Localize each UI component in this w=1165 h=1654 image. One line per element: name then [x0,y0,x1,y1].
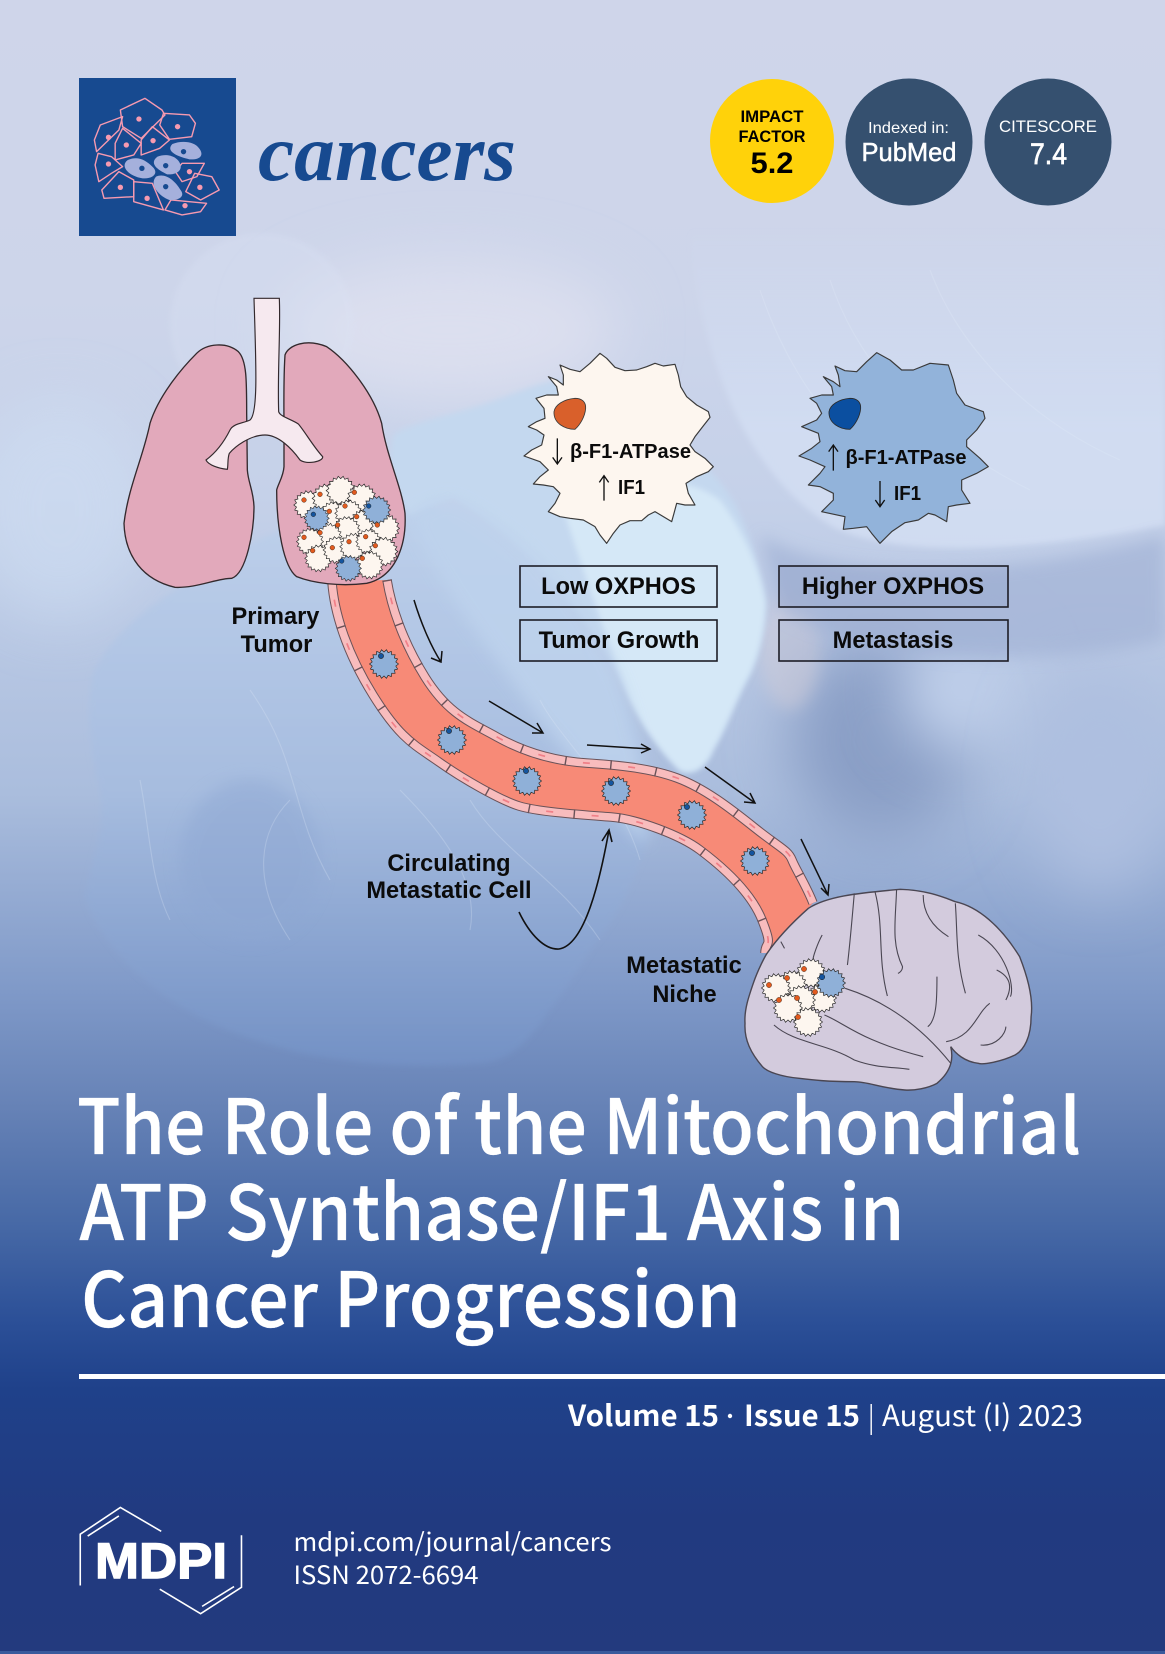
right lung [277,343,405,585]
label: metastatic niche: Niche [652,982,717,1008]
left lung [124,345,254,587]
box: metastasis [779,620,1008,661]
trachea and bronchi [206,298,323,469]
journal URL and ISSN [294,1523,612,1592]
text: low OXPHOS cell markers: β-F1-ATPase [570,441,691,463]
journal logo: blue square with cells [79,78,236,236]
box: tumor growth [520,620,717,661]
MDPI logo: MDPI [95,1533,227,1589]
cell: higher OXPHOS metastatic cell [799,353,988,543]
box: tumor growth: Tumor Growth [539,628,699,654]
near lobe [409,499,647,846]
badge: impact factor: 5.2 [750,147,794,180]
text: low OXPHOS cell markers [570,441,691,499]
text: higher OXPHOS cell markers: IF1 [894,483,921,505]
box: higher OXPHOS [779,566,1008,607]
badge: citescore [984,78,1112,206]
label: circulating metastatic cell with pointer arrow [366,830,612,949]
divider rule [79,1374,1165,1379]
cell: low OXPHOS tumor cell [524,353,713,543]
badge: impact factor [710,79,834,203]
badge: indexed in PubMed: Indexed in: [868,120,949,137]
badge: indexed in PubMed: PubMed [862,137,956,167]
brain with metastatic niche [745,889,1032,1090]
text: higher OXPHOS cell markers [846,447,966,505]
box: low OXPHOS [520,566,717,607]
blood vessel with circulating metastatic cells [332,580,813,953]
flow arrows along the vessel [414,600,829,895]
label: primary tumor: Tumor [241,632,312,658]
label: primary tumor [232,604,319,658]
box: low OXPHOS: Low OXPHOS [541,574,696,600]
title: ATP Synthase/IF1 Axis in [80,1152,904,1262]
journal URL and ISSN: mdpi.com/journal/cancers [294,1523,612,1559]
title: Cancer Progression [81,1239,741,1349]
MDPI logo [80,1507,241,1614]
badge: impact factor: FACTOR [738,128,806,146]
badge: indexed in PubMed [846,78,972,206]
volume and issue line: August (I) 2023 [882,1393,1083,1435]
badge: citescore: CITESCORE [999,117,1097,136]
far lobe [391,380,765,772]
title: The Role of the Mitochondrial [77,1066,1081,1176]
volume and issue line [567,1393,1083,1435]
journal name: cancers [258,110,516,198]
text: low OXPHOS cell markers: IF1 [618,477,645,499]
label: metastatic niche [626,953,742,1008]
upper right bowl [690,230,1165,548]
badge: citescore: 7.4 [1030,138,1067,171]
label: metastatic niche: Metastatic [626,953,742,979]
cell body [85,492,649,1065]
title [77,1066,1081,1349]
volume and issue line: Issue 15 [744,1393,860,1435]
lungs with primary tumor [124,298,405,587]
text: higher OXPHOS cell markers: β-F1-ATPase [846,447,966,469]
journal URL and ISSN: ISSN 2072-6694 [294,1556,479,1592]
volume and issue line: Volume 15 [567,1393,719,1435]
box: metastasis: Metastasis [833,628,953,654]
lightest lobe [560,481,765,772]
label: circulating metastatic cell with pointer arrow: Circulating [387,851,511,877]
box: higher OXPHOS: Higher OXPHOS [802,574,984,600]
tumor cell cluster [294,476,399,581]
label: circulating metastatic cell with pointer arrow: Metastatic Cell [366,878,532,904]
badge: impact factor: IMPACT [740,108,804,126]
label: primary tumor: Primary [232,604,319,630]
